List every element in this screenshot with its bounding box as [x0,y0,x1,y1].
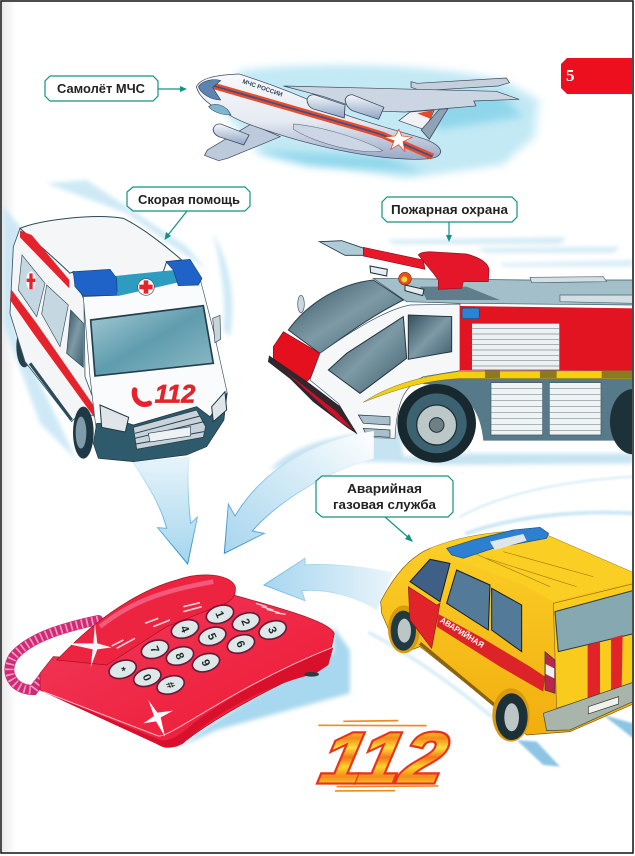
arrow: fire engine to phone [224,432,373,553]
fuselage stripe [211,85,433,157]
side windows [18,255,45,317]
front face [83,281,228,428]
mirror [298,295,304,313]
front bumper [268,356,357,433]
key 8 [164,644,196,668]
near wing [284,86,519,112]
page number tab: 5 [566,66,574,85]
key 1 [204,602,236,627]
belly fairing [294,124,383,152]
hood phone icon [134,390,149,404]
roof hatches [530,277,607,283]
side red stripes [20,231,69,288]
key 5: 5 [205,631,218,642]
front wheel [73,407,94,459]
sky streaks behind airplane [227,65,539,178]
key 9 [190,650,222,675]
key 2: 2 [238,617,252,628]
hood number: 112 [155,380,195,408]
water cannon housing [418,252,489,289]
rear red bands [588,635,623,700]
water cannon barrel [363,247,425,269]
arrow: gas service label [385,517,413,542]
water cannon nozzle [319,241,364,255]
label: fire service: Пожарная охрана [391,203,509,217]
key 1: 1 [212,609,226,620]
label: ambulance: Скорая помощь [138,193,240,207]
roof deck [373,278,633,305]
yellow stripe [363,371,635,402]
van body [381,531,635,735]
rear wheel [16,338,28,368]
coiled cord [9,620,98,690]
sparkle near handset [65,623,112,667]
illustration: fire engine [268,237,635,470]
phone lower edge [42,647,333,748]
front wheel [388,605,420,653]
key 9: 9 [198,658,212,668]
side vents [358,415,390,437]
left page edge shading [2,2,16,852]
label: gas service [316,476,453,517]
handset cradle highlights [112,603,202,648]
arrow: van to phone [264,558,393,610]
key hash [155,673,187,697]
nose glazing [198,80,221,100]
speaker slots [256,603,286,614]
phone shadow [180,627,350,747]
lower shutters [491,383,601,435]
fuselage [196,74,441,159]
emblem star [384,129,412,152]
112 fire logo [314,719,454,798]
illustration: ambulance [3,180,233,462]
cab top lights [370,266,424,296]
engines [213,95,384,145]
windshield [91,306,213,376]
road marks [517,715,633,767]
key 0: 0 [140,672,153,683]
label: gas service: Аварийная [347,482,422,496]
rear window [555,590,635,652]
rear wheel [610,389,635,454]
mirror [213,315,221,343]
phone base [40,595,334,747]
roof cross [138,279,154,295]
label: ambulance [127,187,250,211]
rear panel [553,583,635,708]
grille [133,410,206,449]
arrow: fire service label [446,222,452,242]
label: airplane: Самолёт МЧС [57,82,145,96]
blue roof lights [73,269,117,296]
key star: * [115,666,128,675]
bumper [93,393,227,462]
roof [430,531,635,602]
blue side light [462,308,479,319]
illustration: red telephone [9,575,350,748]
key 6 [225,632,257,656]
van lettering: АВАРИЙНАЯ [438,614,486,650]
key 4 [169,617,201,641]
key 3: 3 [265,625,278,636]
roof band [115,270,177,296]
logo speed lines [318,721,438,791]
key 6: 6 [233,639,247,650]
side panel [10,228,100,422]
key 8: 8 [172,651,186,662]
phone feet [304,672,319,677]
van number plate [588,697,619,714]
keypad [107,602,289,697]
key star [107,657,139,682]
key hash: # [163,680,177,691]
lower wing [205,124,280,161]
airplane lettering: МЧС РОССИИ [241,78,284,99]
key 7 [139,637,171,662]
fire engine speed streaks [270,237,633,470]
red body [460,306,635,371]
white cab [310,304,460,438]
arrow: ambulance label [164,211,187,240]
sparkle near keypad [143,700,173,737]
label: gas service: газовая служба [333,498,437,512]
van speed streaks [370,477,633,723]
page number tab [561,58,634,94]
blue light bar [447,527,549,558]
front wheel [397,384,476,463]
handset [57,575,235,665]
ambulance speed streaks [3,180,233,460]
roof [20,217,182,278]
headlights [100,405,129,432]
arrow: airplane label [158,86,187,92]
label: airplane [45,76,158,101]
side skirt [30,363,72,420]
key 4: 4 [177,624,191,635]
front red panel [273,332,320,382]
van side skirt [420,643,498,708]
red stripe [437,614,545,692]
key 2 [230,610,262,634]
label: fire service [382,197,517,222]
upper shutter [472,323,560,370]
key 5 [196,624,228,649]
illustration: gas service van [264,477,635,767]
illustration: MChS airplane [196,65,539,178]
tail light [545,652,555,693]
rear bumper [543,682,635,731]
key 3 [257,618,289,642]
beacon [399,272,411,285]
side cross [26,271,36,290]
far wing [411,78,509,91]
key 0 [131,665,163,690]
van windows [410,559,450,602]
number plate [148,427,191,442]
red door [408,587,440,648]
logo number: 112 [314,719,454,798]
cab windows [328,317,407,393]
windshield [288,280,403,353]
key 7: 7 [147,644,161,655]
van rear wheel [492,688,530,742]
lower gray body [423,378,635,441]
arrow: ambulance to phone [133,457,197,564]
tail fin and stabiliser [399,110,434,130]
